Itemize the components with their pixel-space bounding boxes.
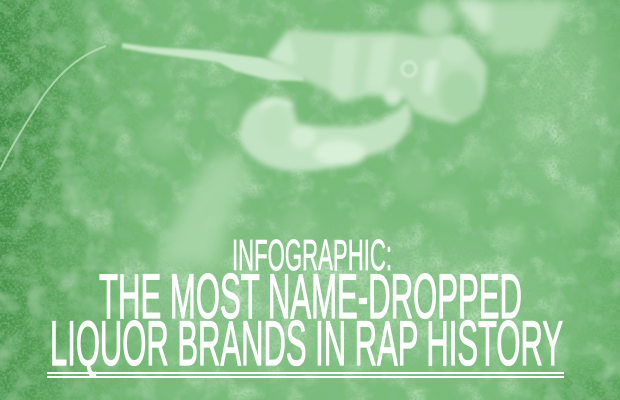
title: kicker line: INFOGRAPHIC:: [232, 231, 392, 280]
double rule under title: [47, 372, 564, 378]
ring highlight on a knuckle: [402, 62, 416, 76]
microphone cable: [0, 46, 106, 170]
sleeve highlight top right: [417, 0, 570, 55]
forearm: [155, 148, 250, 265]
photo: ghosted hand holding a microphone: [0, 0, 597, 265]
thumb and lower finger: [239, 97, 411, 171]
microphone body: [122, 43, 304, 81]
fist: [266, 30, 487, 124]
bokeh circles: [66, 92, 597, 251]
